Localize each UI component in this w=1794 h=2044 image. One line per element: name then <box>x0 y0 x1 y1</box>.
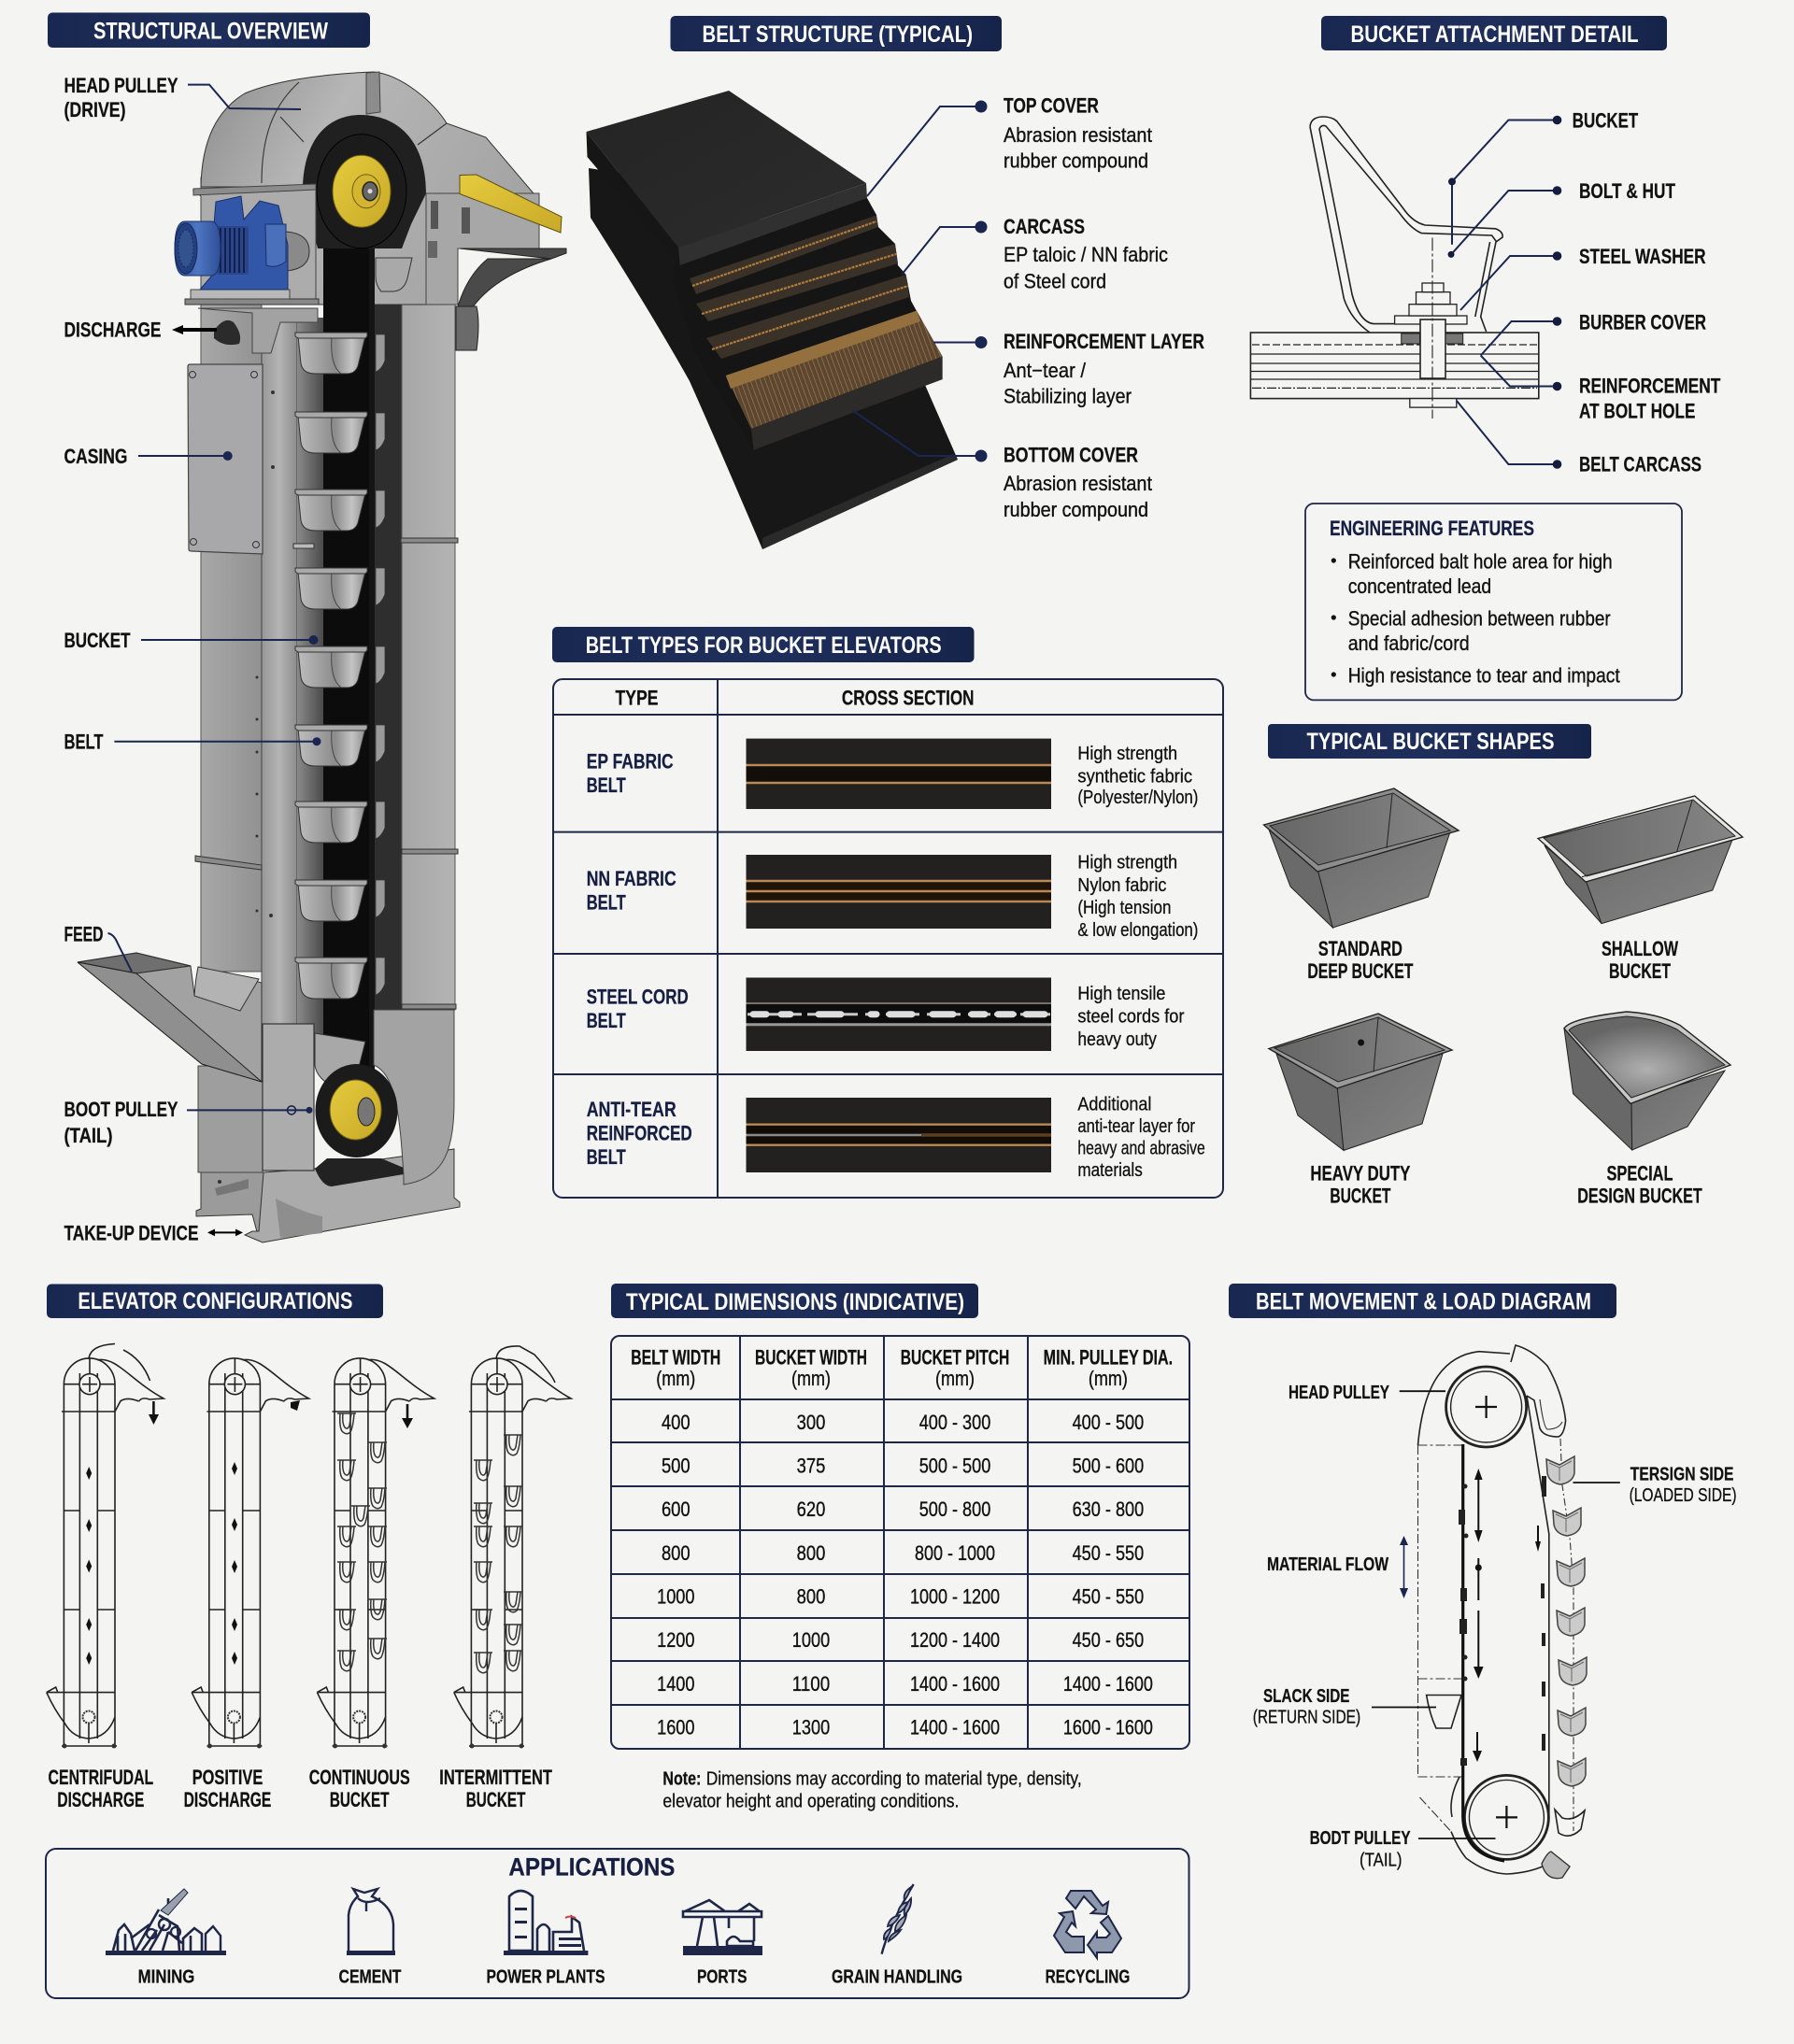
heading: configurations: ELEVATOR CONFIGURATIONS <box>78 1288 352 1314</box>
stacked layer underlay <box>673 198 943 450</box>
discharge opening <box>214 320 240 345</box>
callout: bottom cover <box>852 410 1152 521</box>
table body: 1200 - 1400 <box>910 1628 1000 1652</box>
head pulley <box>1446 1367 1527 1447</box>
base and legs <box>196 1149 460 1242</box>
table header row: (mm) <box>935 1367 975 1390</box>
panel: bucket attachment detail <box>1250 16 1721 700</box>
callout: belt carcass <box>1457 401 1701 476</box>
application: ports <box>683 1900 762 1988</box>
callout: belt carcass: BELT CARCASS <box>1579 453 1701 476</box>
casing outline <box>1418 1445 1463 1832</box>
row: steel cord belt: BELT <box>587 1009 626 1032</box>
heading: bucket attachment: BUCKET ATTACHMENT DETAIL <box>1351 21 1639 48</box>
table body: 1100 <box>792 1672 830 1696</box>
heading: structural overview: STRUCTURAL OVERVIEW <box>93 19 328 45</box>
table body: 1200 <box>657 1628 695 1652</box>
config: continuous bucket: BUCKET <box>330 1788 390 1811</box>
config: centrifugal discharge: CENTRIFUDAL <box>49 1766 153 1789</box>
yellow discharge chute <box>460 175 562 233</box>
panel: belt structure <box>587 16 1204 549</box>
label: head pulley <box>64 74 301 121</box>
table body: 1000 <box>792 1628 830 1652</box>
application: cement <box>338 1889 402 1988</box>
callout: top cover <box>867 93 1152 196</box>
config: positive discharge: POSITIVE <box>192 1766 263 1789</box>
heading: dimensions: TYPICAL DIMENSIONS (INDICATIVE) <box>626 1289 964 1315</box>
application: grain handling <box>832 1884 962 1988</box>
heading: bucket shapes <box>1268 724 1591 759</box>
table header row: BUCKET WIDTH <box>755 1345 867 1369</box>
label: belt: BELT <box>64 731 104 754</box>
top cover <box>587 91 867 265</box>
small upper bucket <box>376 258 412 291</box>
motor support and drive frame <box>185 184 319 353</box>
config: centrifugal discharge <box>47 1343 164 1811</box>
engineering features box: concentrated lead <box>1348 575 1491 598</box>
bucket: heavy duty: HEAVY DUTY <box>1310 1162 1411 1185</box>
label: feed: FEED <box>64 923 103 946</box>
flanges <box>195 538 458 1009</box>
row: steel cord belt: High tensile <box>1077 984 1165 1004</box>
config: intermittent bucket <box>439 1346 571 1811</box>
label: boot pulley: (TAIL) <box>64 1124 112 1147</box>
table body: 400 - 500 <box>1073 1411 1144 1434</box>
casing bolts <box>218 390 275 1184</box>
application: mining <box>106 1889 226 1988</box>
heading: belt structure: BELT STRUCTURE (TYPICAL) <box>703 21 973 48</box>
row: anti-tear reinforced belt: Additional <box>1077 1095 1151 1115</box>
table body: 400 <box>662 1411 691 1434</box>
table body: 800 - 1000 <box>915 1541 995 1565</box>
head lower housing right <box>426 193 539 305</box>
table body: 1000 - 1200 <box>910 1585 1000 1609</box>
dome flange <box>366 72 380 114</box>
application: power plants <box>486 1891 605 1988</box>
casing front post <box>262 308 297 1028</box>
row: anti-tear reinforced belt: BELT <box>587 1145 626 1169</box>
application: grain handling: GRAIN HANDLING <box>832 1967 962 1988</box>
applications frame <box>46 1849 1189 1998</box>
row: EP fabric belt: High strength <box>1077 744 1177 764</box>
applications title: APPLICATIONS <box>508 1852 675 1881</box>
table body: 500 - 600 <box>1073 1455 1144 1478</box>
label: bucket <box>64 629 318 652</box>
belt types table: CROSS SECTION <box>842 687 974 710</box>
callout: bucket: BUCKET <box>1573 109 1639 133</box>
callout: bottom cover: BOTTOM COVER <box>1004 444 1138 467</box>
hood <box>1511 1345 1566 1437</box>
label: discharge: DISCHARGE <box>64 319 161 342</box>
bucket elevator illustration <box>78 72 566 1242</box>
config: continuous bucket: CONTINUOUS <box>309 1766 410 1789</box>
table body: 400 - 300 <box>919 1411 990 1434</box>
heading: belt movement: BELT MOVEMENT & LOAD DIAGRAM <box>1256 1289 1591 1315</box>
bucket: standard deep: STANDARD <box>1318 937 1402 960</box>
dimensions table <box>611 1336 1189 1749</box>
callout: bolt and hut <box>1448 179 1675 258</box>
table header row: (mm) <box>656 1367 695 1390</box>
access door panel <box>188 364 263 554</box>
engineering features box: Reinforced balt hole area for high <box>1348 549 1613 573</box>
head dome <box>201 72 539 305</box>
table header row <box>631 1345 1173 1390</box>
application: cement: CEMENT <box>338 1967 402 1988</box>
callout: steel washer: STEEL WASHER <box>1579 245 1706 268</box>
callout: steel washer <box>1460 245 1706 310</box>
table header row: BUCKET PITCH <box>901 1345 1009 1369</box>
table body: 1600 - 1600 <box>1063 1716 1153 1739</box>
config: positive discharge: DISCHARGE <box>184 1788 271 1811</box>
callout: burber cover <box>1481 310 1706 355</box>
row: EP fabric belt: EP FABRIC <box>587 749 674 773</box>
label: tension side <box>1573 1465 1737 1506</box>
belt types table: TYPE <box>615 687 658 710</box>
label: tension side: (LOADED SIDE) <box>1630 1485 1737 1506</box>
panel: belt movement and load diagram <box>1229 1284 1737 1879</box>
row: steel cord belt: steel cords for <box>1077 1007 1185 1028</box>
table header row: BELT WIDTH <box>631 1345 720 1369</box>
heading: configurations <box>47 1284 383 1318</box>
loaded buckets <box>1540 1399 1587 1879</box>
label: boot pulley <box>1310 1828 1495 1870</box>
motion arrows <box>1473 1469 1541 1762</box>
slack bucket <box>1427 1695 1461 1728</box>
table body: 450 - 550 <box>1073 1541 1144 1565</box>
attachment drawing <box>1250 117 1539 419</box>
black belt <box>323 245 375 1080</box>
table header row: (mm) <box>1089 1367 1128 1390</box>
belt loop diagram <box>1418 1345 1587 1879</box>
label: material flow <box>1267 1536 1408 1598</box>
label: head pulley: (DRIVE) <box>64 98 125 121</box>
bucket chain centre line <box>1560 1439 1573 1831</box>
row: EP fabric belt: synthetic fabric <box>1077 766 1192 787</box>
note: elevator height and operating conditions. <box>662 1792 959 1812</box>
discharge spout and shelf <box>456 248 566 350</box>
panel: elevator configurations <box>47 1284 571 1811</box>
table body: 800 <box>797 1541 825 1565</box>
table body: 1300 <box>792 1716 830 1739</box>
bucket: special design: DESIGN BUCKET <box>1577 1185 1702 1207</box>
label: casing <box>64 445 233 468</box>
table body <box>657 1411 1153 1739</box>
callout: reinforcement layer: REINFORCEMENT LAYER <box>1004 330 1204 353</box>
row: steel cord belt <box>587 977 1185 1051</box>
label: feed <box>64 923 132 972</box>
table body: 500 <box>662 1455 691 1478</box>
right casing <box>402 305 455 1010</box>
callout: bolt and hut: BOLT & HUT <box>1579 179 1675 203</box>
layer three <box>706 275 909 359</box>
bucket: heavy duty: BUCKET <box>1330 1185 1391 1207</box>
lower casing box <box>198 1066 263 1172</box>
blue motor <box>175 196 309 290</box>
row: NN fabric belt: Nylon fabric <box>1077 875 1166 896</box>
belt layers illustration <box>587 91 958 549</box>
row: NN fabric belt <box>587 852 1198 941</box>
application: recycling: RECYCLING <box>1046 1967 1130 1988</box>
callout: bucket <box>1448 109 1639 245</box>
row: NN fabric belt: BELT <box>587 891 626 914</box>
table body: 800 <box>797 1585 825 1609</box>
callout: reinforcement layer: Ant−tear / <box>1004 359 1087 382</box>
row: NN fabric belt: (High tension <box>1077 898 1171 918</box>
row: anti-tear reinforced belt: heavy and abrasive <box>1077 1138 1205 1158</box>
panel: typical bucket shapes <box>1263 724 1743 1207</box>
callout: reinforcement layer: Stabilizing layer <box>1004 384 1132 407</box>
label: slack side: SLACK SIDE <box>1263 1686 1349 1707</box>
callout: burber cover: BURBER COVER <box>1579 310 1706 334</box>
table body: 1400 <box>657 1672 695 1696</box>
config: centrifugal discharge: DISCHARGE <box>57 1788 144 1811</box>
config: intermittent bucket: INTERMITTENT <box>439 1766 552 1789</box>
label: boot pulley: (TAIL) <box>1360 1850 1402 1870</box>
bucket: shallow: SHALLOW <box>1602 937 1678 960</box>
row: anti-tear reinforced belt: anti-tear layer for <box>1077 1116 1195 1137</box>
label: boot pulley: BODT PULLEY <box>1310 1828 1411 1849</box>
table body: 450 - 550 <box>1073 1585 1144 1609</box>
panel: typical dimensions <box>611 1284 1189 1812</box>
engineering features box: Special adhesion between rubber <box>1348 606 1611 630</box>
row: EP fabric belt: BELT <box>587 774 626 797</box>
row: steel cord belt: STEEL CORD <box>587 986 689 1009</box>
buckets <box>295 333 385 999</box>
row: EP fabric belt: (Polyester/Nylon) <box>1077 788 1198 808</box>
callout: carcass: EP taloic / NN fabric <box>1004 243 1168 266</box>
heading: belt types: BELT TYPES FOR BUCKET ELEVATORS <box>586 632 942 659</box>
table body: 1400 - 1600 <box>1063 1672 1153 1696</box>
application: mining: MINING <box>138 1967 194 1988</box>
callout: carcass: CARCASS <box>1004 215 1085 238</box>
bucket: shallow <box>1538 796 1743 983</box>
layer four reinforcement <box>726 311 943 450</box>
label: boot pulley: BOOT PULLEY <box>64 1098 178 1121</box>
config: intermittent bucket: BUCKET <box>466 1788 526 1811</box>
callout: top cover: TOP COVER <box>1004 93 1099 117</box>
row: steel cord belt: heavy outy <box>1077 1029 1157 1050</box>
label: casing: CASING <box>64 445 127 468</box>
label: slack side <box>1253 1686 1436 1727</box>
callout: reinforcement layer <box>934 330 1204 407</box>
engineering features box: High resistance to tear and impact <box>1348 663 1620 688</box>
table body: 1400 - 1600 <box>910 1716 1000 1739</box>
belt side band <box>370 305 402 1010</box>
row: EP fabric belt <box>587 739 1198 809</box>
label: bucket: BUCKET <box>64 629 131 652</box>
label: belt <box>64 731 321 754</box>
label: boot pulley <box>64 1098 312 1147</box>
note: Note: <box>662 1768 701 1789</box>
label: slack side: (RETURN SIDE) <box>1253 1707 1360 1727</box>
label: take-up device: TAKE-UP DEVICE <box>64 1222 198 1245</box>
bucket: special design <box>1564 1012 1730 1207</box>
table body: 500 - 800 <box>919 1498 990 1521</box>
head pulley <box>303 115 426 248</box>
bucket outline <box>1310 117 1502 333</box>
table body: 1400 - 1600 <box>910 1672 1000 1696</box>
row: NN fabric belt: & low elongation) <box>1077 920 1198 941</box>
callout: reinforcement at bolt hole <box>1481 355 1721 422</box>
label: head pulley: HEAD PULLEY <box>1289 1383 1390 1403</box>
belt section <box>1250 333 1539 399</box>
config: continuous bucket <box>309 1358 434 1811</box>
callout: top cover: Abrasion resistant <box>1004 123 1152 147</box>
inner casing <box>297 318 323 1056</box>
label: material flow: MATERIAL FLOW <box>1267 1554 1388 1575</box>
heading: structural overview <box>48 13 370 48</box>
callout: bottom cover: rubber compound <box>1004 498 1148 521</box>
bolt and nuts <box>1395 237 1467 419</box>
bottom cover <box>589 168 958 549</box>
callout: reinforcement at bolt hole: AT BOLT HOLE <box>1579 399 1695 422</box>
row: anti-tear reinforced belt <box>587 1095 1205 1181</box>
table header row: (mm) <box>791 1367 831 1390</box>
callout: carcass <box>902 215 1168 293</box>
heading: bucket attachment <box>1321 16 1667 50</box>
table body: 630 - 800 <box>1073 1498 1144 1521</box>
table body: 600 <box>662 1498 691 1521</box>
panel: belt types <box>552 627 1223 1198</box>
label: head pulley: HEAD PULLEY <box>64 74 178 97</box>
engineering features box: and fabric/cord <box>1348 632 1470 655</box>
belt types table <box>553 679 1223 1198</box>
row: NN fabric belt: High strength <box>1077 852 1177 873</box>
row: anti-tear reinforced belt: REINFORCED <box>587 1121 692 1144</box>
layer one <box>690 216 878 294</box>
engineering features box <box>1305 504 1682 700</box>
feed hopper <box>78 953 262 1082</box>
note <box>662 1768 1082 1812</box>
table body: 500 - 500 <box>919 1455 990 1478</box>
callout: reinforcement at bolt hole: REINFORCEMENT <box>1579 375 1721 398</box>
belt lines <box>1463 1444 1504 1861</box>
casing left face <box>201 177 262 972</box>
heading: bucket shapes: TYPICAL BUCKET SHAPES <box>1306 729 1555 755</box>
table body: 620 <box>797 1498 825 1521</box>
bucket: special design: SPECIAL <box>1607 1162 1673 1185</box>
application: recycling <box>1046 1891 1130 1988</box>
callout: carcass: of Steel cord <box>1004 270 1106 293</box>
bucket: shallow: BUCKET <box>1609 959 1671 983</box>
label: tension side: TERSIGN SIDE <box>1630 1465 1734 1485</box>
table body: 1000 <box>657 1585 695 1609</box>
table body: 450 - 650 <box>1073 1628 1144 1652</box>
heading: belt structure <box>671 16 1002 51</box>
config: positive discharge <box>184 1358 308 1811</box>
panel: applications <box>46 1849 1189 1998</box>
table body: 375 <box>797 1455 825 1478</box>
bucket: heavy duty <box>1269 1014 1452 1207</box>
bucket: standard deep: DEEP BUCKET <box>1307 959 1414 983</box>
engineering features box: ENGINEERING FEATURES <box>1330 517 1534 540</box>
application: ports: PORTS <box>697 1967 747 1988</box>
row: anti-tear reinforced belt: materials <box>1077 1160 1143 1181</box>
table body: 300 <box>797 1411 825 1434</box>
boot pulley <box>1464 1775 1548 1859</box>
callout: top cover: rubber compound <box>1004 149 1148 173</box>
application: power plants: POWER PLANTS <box>486 1967 605 1988</box>
table header row: MIN. PULLEY DIA. <box>1044 1345 1173 1369</box>
row: anti-tear reinforced belt: ANTI-TEAR <box>587 1098 676 1121</box>
table body: 800 <box>662 1541 691 1565</box>
heading: dimensions <box>611 1284 978 1318</box>
table body: 1600 <box>657 1716 695 1739</box>
belt fittings <box>1459 1476 1546 1766</box>
row: NN fabric belt: NN FABRIC <box>587 867 676 890</box>
heading: belt types <box>552 627 974 662</box>
callout: bottom cover: Abrasion resistant <box>1004 472 1152 495</box>
panel: structural overview <box>48 13 566 1245</box>
boot section <box>263 1010 454 1185</box>
layer two <box>696 244 898 321</box>
bucket: standard deep <box>1263 788 1459 983</box>
note: Dimensions may according to material type, density, <box>706 1768 1082 1789</box>
heading: belt movement <box>1229 1284 1616 1318</box>
